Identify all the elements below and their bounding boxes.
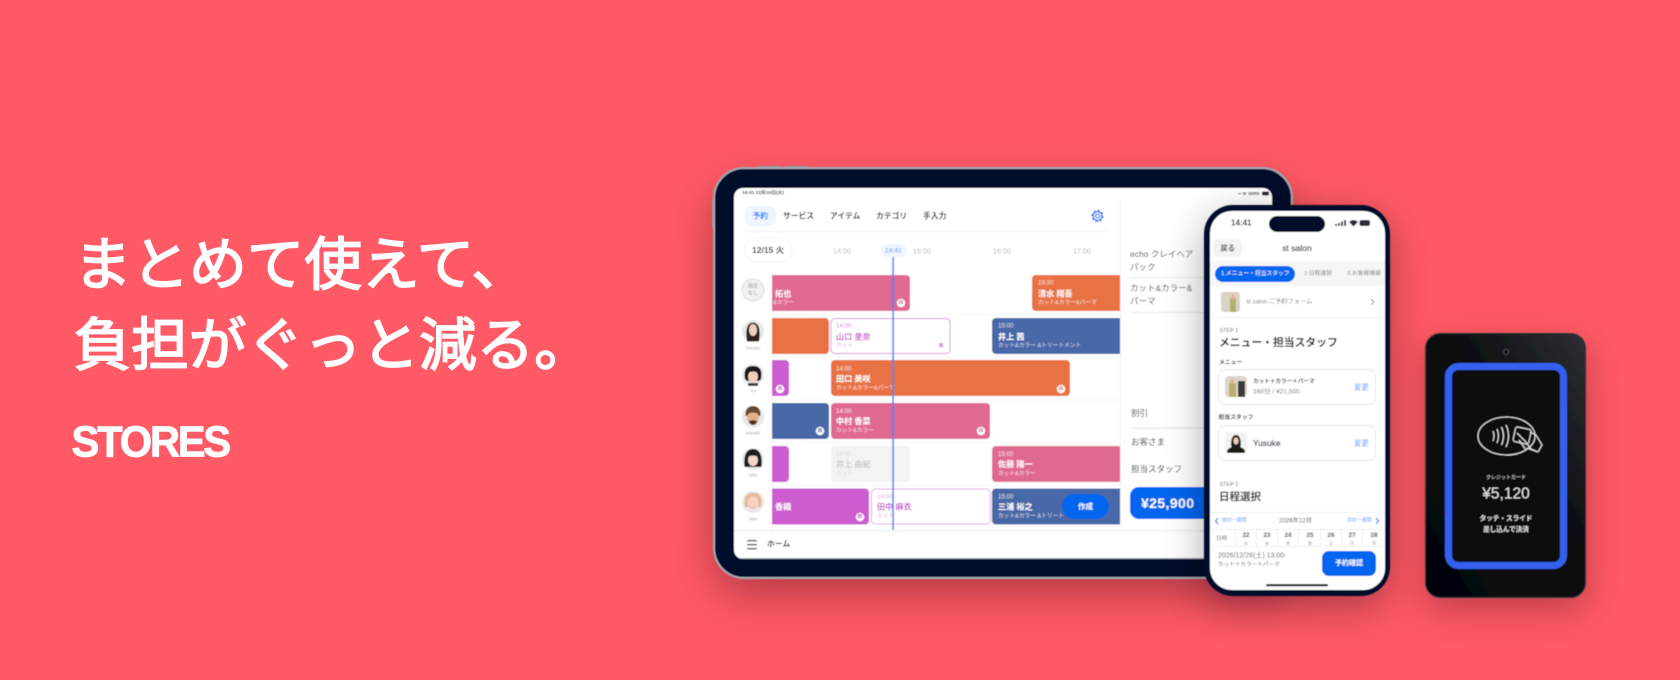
- reservation: 拓也: [760, 275, 910, 311]
- step 1 heading: メニュー・担当スタッフ: [1219, 335, 1338, 349]
- reservation: 井上 由紀 (cancelled): 井上 由紀: [836, 459, 871, 469]
- reservation: 山口 里奈: カット: [836, 342, 853, 349]
- reservation: 山口 里奈: 再: [938, 343, 944, 349]
- back button: [1213, 239, 1242, 257]
- headline: [74, 234, 592, 378]
- date picker row: [1216, 530, 1378, 546]
- tab navigation: サービス: [783, 210, 814, 220]
- reservation: 井上 由紀 (cancelled): カット: [836, 470, 853, 477]
- week navigation: 前の一週間: [1222, 516, 1247, 524]
- reservation: 山口 里奈: 14:00: [836, 322, 852, 330]
- reservation: 井上 由紀 (cancelled): [831, 446, 910, 482]
- terminal shadow: [1425, 345, 1586, 610]
- reservation: 田中 麻衣: 14:00: [877, 494, 893, 500]
- week navigation: 2026年12月: [1279, 516, 1312, 524]
- avatar: Miki: [742, 448, 764, 478]
- checkout panel: カット&カラー&: [1130, 283, 1193, 293]
- tab navigation: アイテム: [830, 212, 861, 220]
- staff avatars: [742, 279, 764, 522]
- phone shadow: [1204, 217, 1390, 608]
- avatar: Yui: [742, 364, 764, 394]
- avatar: Masaki: Masaki: [746, 430, 760, 436]
- tablet body: [714, 168, 1292, 578]
- booking footer: カット＋カラー＋パーマ: [1218, 561, 1280, 568]
- step tabs: 1.メニュー・担当スタッフ: [1221, 269, 1290, 277]
- home indicator: [1266, 584, 1328, 586]
- phone: [1204, 205, 1390, 596]
- date picker row: 24: [1284, 532, 1292, 539]
- phone status bar: 14:41: [1231, 218, 1252, 228]
- tab navigation: カテゴリ: [876, 210, 907, 220]
- date picker row: 28: [1370, 532, 1378, 539]
- status bar: ▪▪ ᯤ 100%: [1238, 191, 1260, 196]
- staff section: 担当スタッフ: [1218, 413, 1253, 421]
- date picker row: 金: [1308, 540, 1312, 546]
- menu section: 160分 / ¥21,500: [1253, 386, 1300, 396]
- reservation: 三浦 裕之: [992, 488, 1132, 524]
- reservation: purple block: [772, 359, 790, 397]
- step 2 heading: STEP 2: [1220, 482, 1238, 488]
- step tabs: 2.日程選択: [1304, 269, 1332, 277]
- terminal text: クレジットカード: [1486, 475, 1526, 481]
- timeline header: 14:00: [833, 246, 851, 256]
- bottom bar: ホーム: [767, 540, 790, 548]
- blue LED frame: [1448, 366, 1564, 566]
- avatar: unassigned: 指定: [748, 282, 758, 290]
- reservation: 田口 美咲: 再: [1058, 386, 1064, 392]
- reservation: 拓也: &カラー: [773, 299, 794, 306]
- status bar: 14:41 12月15日(火): [742, 190, 784, 196]
- tablet: [712, 166, 1292, 578]
- reservation: orange block: [772, 317, 830, 355]
- reservation: 中村 香菜: 14:00: [836, 408, 852, 415]
- terminal text: 差し込んで決済: [1483, 524, 1529, 534]
- reservation: 井上 茜: 井上 茜: [998, 332, 1025, 342]
- terminal camera: [1503, 349, 1509, 355]
- terminal text: ¥5,120: [1481, 486, 1530, 502]
- reservation: 田中 麻衣: [872, 489, 990, 524]
- booking footer: 予約確認: [1335, 558, 1363, 567]
- headline: まとめて使えて、: [74, 234, 529, 298]
- avatar: Yui: Yui: [750, 388, 756, 394]
- avatar: Masaki: [742, 406, 764, 436]
- reservation: purple block: [772, 445, 790, 483]
- status bar: [742, 190, 1269, 196]
- week navigation: [1210, 512, 1385, 530]
- timeline header: [833, 244, 1091, 257]
- date pill: 12/15 火: [752, 245, 785, 255]
- reservation: 田口 美咲: カット&カラー&パーマ: [836, 384, 895, 392]
- reservation: 田中 麻衣: カット: [877, 512, 894, 520]
- form row: st salon ご予約フォーム: [1246, 298, 1312, 306]
- date picker row: 26: [1327, 532, 1335, 539]
- reservation: 清水 翔吾: 15:30: [1038, 280, 1054, 286]
- reservation: 三浦 裕之: カット&カラー &トリート: [998, 512, 1064, 520]
- phone body: [1204, 205, 1390, 596]
- date picker row: 23: [1263, 532, 1271, 539]
- timeline header: 17:00: [1073, 246, 1091, 256]
- tab navigation: [745, 206, 947, 226]
- create button: [1062, 494, 1109, 519]
- avatar: Yusuke: [742, 320, 764, 350]
- timeline header: 16:00: [993, 246, 1011, 256]
- checkout panel: パーマ: [1130, 296, 1156, 306]
- staff section: 変更: [1354, 438, 1369, 448]
- date picker row: 土: [1329, 540, 1333, 546]
- reservation: 井上 由紀 (cancelled): 14:00: [836, 451, 852, 458]
- current time line: [892, 257, 894, 530]
- menu section: カット＋カラー＋パーマ: [1253, 378, 1315, 385]
- payment terminal: [1426, 334, 1586, 598]
- staff section: Yusuke: [1253, 438, 1281, 448]
- menu section: メニュー: [1219, 359, 1242, 366]
- dynamic island: [1269, 216, 1325, 232]
- reservation: 拓也: 再: [898, 300, 904, 306]
- reservation: 佐藤 陽一: カット&カラー: [998, 470, 1036, 477]
- logo: STORES: STORES: [72, 417, 230, 467]
- reservation: 中村 香菜: [831, 403, 990, 439]
- reservation: 佐藤 陽一: 15:00: [998, 451, 1014, 458]
- staff section: [1218, 413, 1376, 460]
- date picker row: 水: [1265, 540, 1269, 546]
- terminal text: タッチ・スライド: [1480, 514, 1532, 522]
- reservation: 佐藤 陽一: [992, 446, 1132, 482]
- reservation: 山口 里奈: 山口 里奈: [836, 332, 871, 342]
- checkout panel: echo クレイヘア: [1130, 249, 1193, 259]
- checkout panel: 担当スタッフ: [1131, 464, 1182, 474]
- checkout panel: パック: [1130, 262, 1156, 272]
- week navigation: 次の一週間: [1347, 516, 1372, 524]
- avatar: Mai: [742, 491, 764, 522]
- avatar: unassigned: なし: [748, 290, 758, 296]
- icon: contactless payment: [1478, 417, 1542, 455]
- reservation: 清水 翔吾: 清水 翔吾: [1038, 288, 1073, 298]
- date picker row: 日時: [1216, 534, 1228, 542]
- phone status bar: [1231, 219, 1371, 227]
- reservation: 香織: 新: [857, 513, 863, 520]
- reservation: 拓也: 拓也: [775, 288, 791, 298]
- step 2 heading: [1219, 482, 1261, 503]
- date picker row: 25: [1306, 532, 1314, 539]
- step tabs: 3.お客様情報: [1347, 269, 1381, 277]
- booking footer: [1210, 546, 1385, 590]
- icon: settings gear: [1092, 210, 1103, 222]
- step 1 heading: STEP 1: [1220, 328, 1238, 334]
- reservation: 清水 翔吾: カット&カラー&パーマ: [1038, 299, 1097, 306]
- reservation: 佐藤 陽一: 佐藤 陽一: [998, 459, 1033, 469]
- tablet shadow: [713, 187, 1293, 595]
- reservation: 中村 香菜: 再: [978, 428, 984, 434]
- avatar: Miki: Miki: [749, 472, 757, 478]
- create button: 作成: [1078, 501, 1094, 511]
- date picker row: 月: [1372, 540, 1376, 546]
- reservation: 香織: 香織: [775, 502, 791, 512]
- tablet screen: [734, 188, 1272, 559]
- tab navigation: 手入力: [923, 210, 947, 220]
- reservation: purple block: 再: [777, 386, 783, 392]
- form row: [1210, 292, 1385, 318]
- timeline header: 14:41: [885, 248, 902, 254]
- reservation: 井上 茜: 15:00: [998, 322, 1014, 330]
- timeline header: 15:00: [913, 246, 931, 256]
- shop title: st salon: [1282, 243, 1312, 253]
- menu section: [1218, 359, 1376, 404]
- reservation: 田中 麻衣: 田中 麻衣: [877, 502, 912, 512]
- reservation: 田口 美咲: 14:00: [836, 366, 852, 372]
- tab navigation: 予約: [752, 210, 768, 220]
- checkout panel: お客さま: [1131, 437, 1165, 447]
- checkout panel: 割引: [1131, 408, 1148, 418]
- avatar: unassigned: [742, 279, 764, 301]
- reservation: 井上 茜: カット&カラー &トリートメント: [998, 342, 1081, 349]
- reservation: 田口 美咲: 田口 美咲: [836, 374, 871, 384]
- reservation: 山口 里奈: [831, 318, 950, 354]
- date picker row: 27: [1348, 532, 1356, 539]
- back button: 戻る: [1220, 244, 1235, 252]
- reservation: 中村 香菜: カット&カラー: [836, 427, 874, 434]
- reservation: 清水 翔吾: [1032, 275, 1132, 311]
- reservation grid: [760, 275, 1132, 524]
- date picker row: 木: [1286, 540, 1290, 546]
- tablet hardware buttons: [712, 166, 808, 228]
- step 1 heading: [1219, 328, 1338, 349]
- step 2 heading: 日程選択: [1219, 490, 1261, 503]
- date picker row: 日: [1350, 540, 1354, 546]
- step tabs: [1210, 261, 1385, 286]
- reservation: 三浦 裕之: 三浦 裕之: [998, 502, 1033, 512]
- reservation: 田口 美咲: [831, 360, 1070, 396]
- reservation: blue block: 再: [817, 428, 823, 434]
- reservation: 井上 茜: [992, 318, 1132, 354]
- reservation: blue block: [772, 402, 830, 440]
- menu section: 変更: [1354, 382, 1369, 392]
- booking footer: 2026/12/26(土) 13:00-: [1218, 550, 1287, 560]
- reservation: 中村 香菜: 中村 香菜: [836, 416, 871, 426]
- avatar: Mai: Mai: [749, 516, 757, 522]
- phone screen: [1210, 211, 1385, 590]
- reservation: 三浦 裕之: 15:00: [998, 494, 1014, 500]
- reservation: 香織: [760, 488, 869, 524]
- terminal body: [1426, 334, 1586, 598]
- checkout panel: ¥25,900: [1141, 495, 1194, 511]
- checkout panel: [1129, 250, 1205, 520]
- avatar: Yusuke: Yusuke: [746, 346, 761, 350]
- date picker row: 火: [1244, 540, 1248, 546]
- terminal text: [1480, 475, 1532, 534]
- headline: 負担がぐっと減る。: [74, 314, 592, 378]
- date picker row: 22: [1242, 532, 1250, 539]
